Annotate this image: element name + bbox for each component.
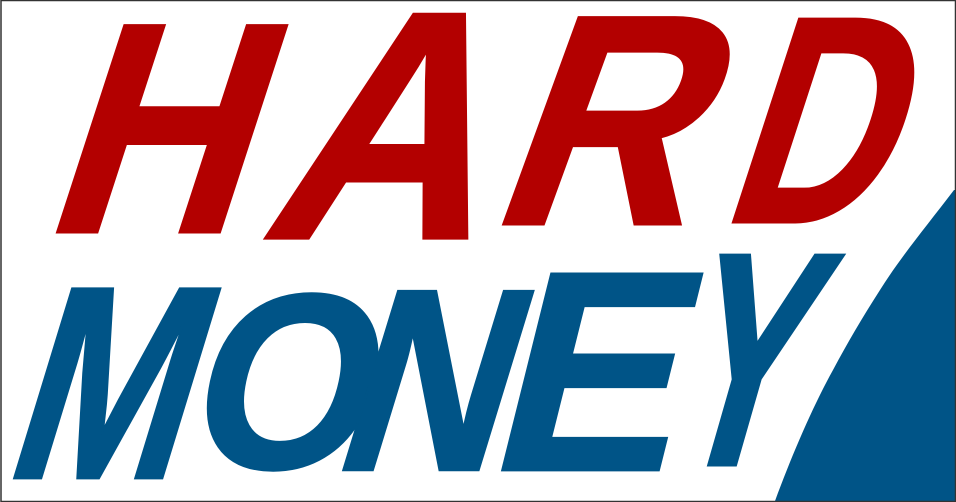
word: HARD xyxy=(18,0,956,308)
blue corner wedge xyxy=(775,190,956,501)
word: MONEY xyxy=(0,189,866,502)
